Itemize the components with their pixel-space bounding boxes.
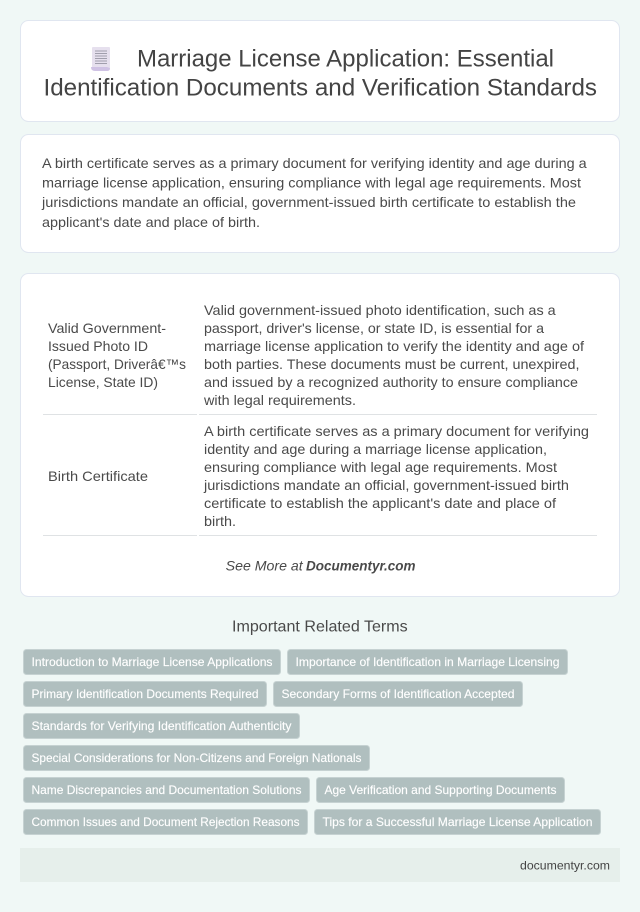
text block: introduction: jurisdictions mandate an official, government-issued birth certificate to establish the xyxy=(41,194,576,210)
description: photo ID: with legal requirements. xyxy=(203,392,356,408)
label: photo ID: Valid Government- xyxy=(48,320,166,336)
description: birth certificate: birth. xyxy=(204,513,236,529)
tag: Introduction to Marriage License Applications xyxy=(32,655,272,669)
description: photo ID: Valid government-issued photo identification, such as a xyxy=(204,302,556,318)
tag xyxy=(24,778,310,802)
link: see more: Documentyr.com xyxy=(306,558,416,574)
tag xyxy=(24,714,300,738)
description: birth certificate xyxy=(203,423,589,529)
description: photo ID: passport, driver's license, or state ID, is essential for a xyxy=(204,320,544,336)
tag xyxy=(316,778,564,802)
description: birth certificate: certificate to establish the applicant's date and place of xyxy=(204,495,556,511)
heading: Marriage License Application: Essential xyxy=(137,46,554,72)
text block: introduction: marriage license application, ensuring compliance with legal age requirements. Most xyxy=(42,175,581,191)
tag: Standards for Verifying Identification Authenticity xyxy=(32,719,292,733)
tag xyxy=(274,682,522,706)
description: birth certificate: jurisdictions mandate an official, government-issued birth xyxy=(203,477,569,493)
tag xyxy=(288,650,568,674)
label: photo ID: License, State ID) xyxy=(48,374,158,390)
tag xyxy=(24,810,308,834)
tag: Tips for a Successful Marriage License Application xyxy=(322,815,592,829)
footer: documentyr.com xyxy=(520,858,610,872)
tag: Special Considerations for Non-Citizens and Foreign Nationals xyxy=(32,751,362,765)
tag: Common Issues and Document Rejection Reasons xyxy=(32,815,300,829)
description: photo ID: both parties. These documents must be current, unexpired, xyxy=(204,356,580,372)
link: see more: See More at xyxy=(226,558,304,574)
tag: Importance of Identification in Marriage Licensing xyxy=(296,655,560,669)
tag xyxy=(24,746,370,770)
panel: introduction xyxy=(20,134,620,252)
tag: Secondary Forms of Identification Accepted xyxy=(282,687,514,701)
footer xyxy=(20,848,620,882)
label: photo ID: (Passport, Driverâ€™s xyxy=(48,356,186,372)
description: birth certificate: identity and age during a marriage license application, xyxy=(204,441,547,457)
description: photo ID xyxy=(203,302,584,408)
description: birth certificate: ensuring compliance with legal age requirements. Most xyxy=(204,459,557,475)
heading: Identification Documents and Verification Standards xyxy=(44,74,597,102)
label: birth certificate: Birth Certificate xyxy=(48,468,148,484)
heading: related terms: Important Related Terms xyxy=(232,619,408,636)
text block: introduction xyxy=(41,155,587,230)
tag xyxy=(24,682,266,706)
text block: introduction: applicant's date and place of birth. xyxy=(42,214,260,230)
tag: Name Discrepancies and Documentation Solutions xyxy=(32,783,302,797)
related terms tags xyxy=(24,650,600,834)
link: see more xyxy=(226,558,416,574)
description: birth certificate: A birth certificate serves as a primary document for verifying xyxy=(204,423,589,439)
table row: birth certificate xyxy=(43,423,597,536)
tag: Age Verification and Supporting Documents xyxy=(324,783,556,797)
label: photo ID xyxy=(48,320,186,390)
tag xyxy=(24,650,280,674)
panel: documents table xyxy=(20,274,620,596)
text block: introduction: A birth certificate serves as a primary document for verifying identity and age during a xyxy=(42,155,587,171)
icon: document scroll xyxy=(91,47,110,71)
tag: Primary Identification Documents Required xyxy=(32,687,258,701)
description: photo ID: marriage license application to verify the identity and age of xyxy=(204,338,584,354)
table row: photo ID xyxy=(43,302,597,415)
label: photo ID: Issued Photo ID xyxy=(48,338,148,354)
heading xyxy=(44,46,597,102)
description: photo ID: and issued by a recognized authority to ensure compliance xyxy=(204,374,578,390)
tag xyxy=(314,810,600,834)
panel: title card xyxy=(20,20,620,122)
